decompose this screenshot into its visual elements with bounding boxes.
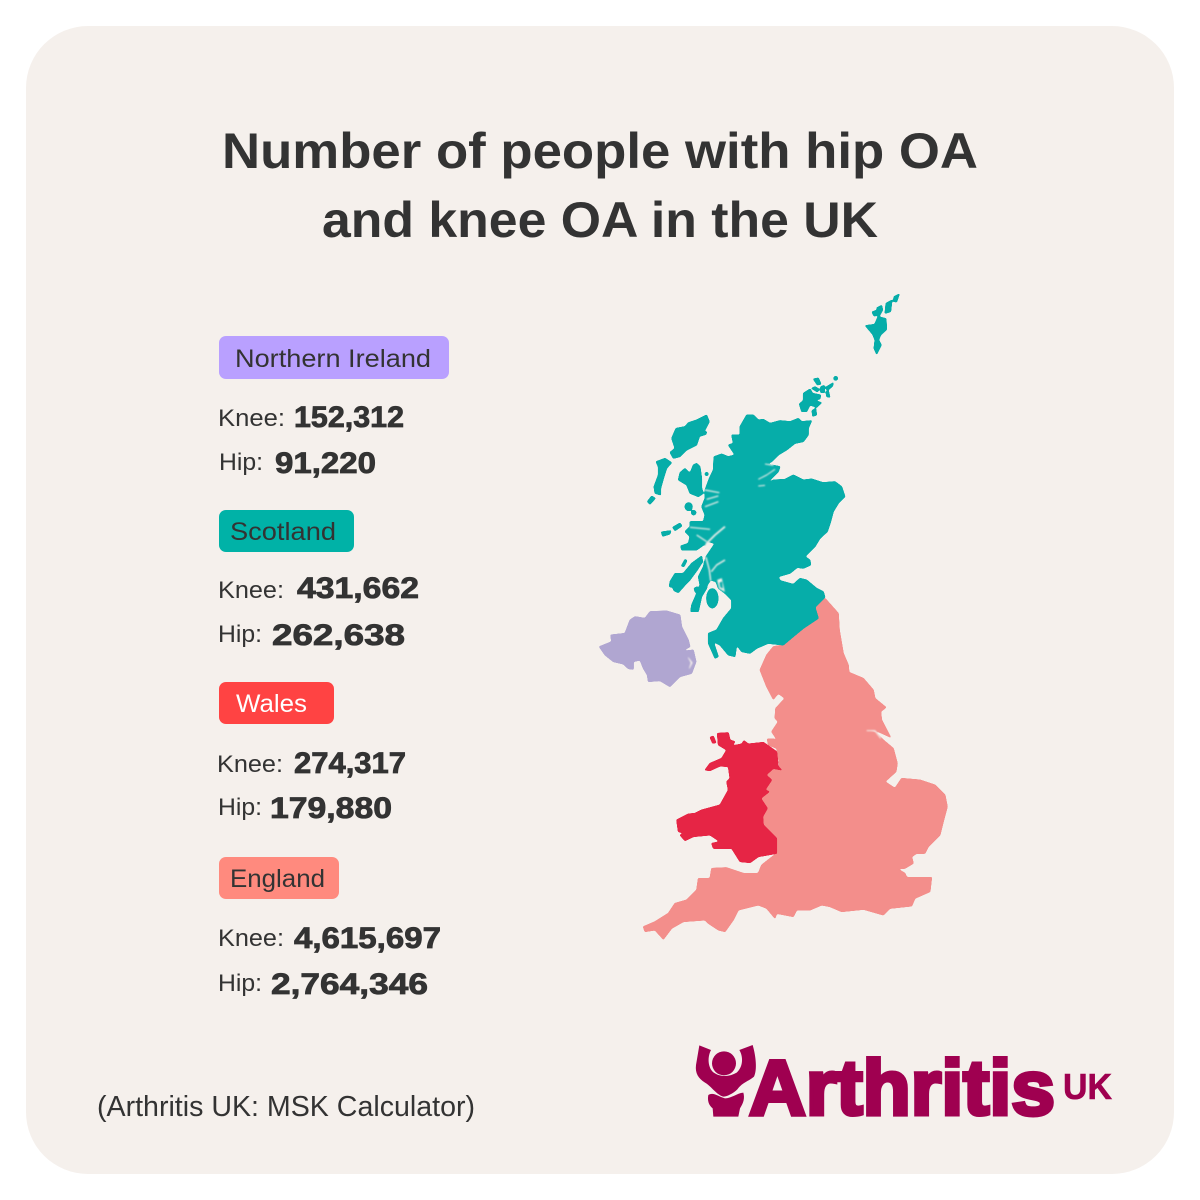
title xyxy=(222,123,978,248)
knee count: Scotland: Knee: xyxy=(218,577,284,604)
knee count: Wales: 274,317 xyxy=(294,747,406,780)
knee count: Wales: Knee: xyxy=(217,751,283,778)
badge: Wales: Wales xyxy=(236,690,307,718)
hip count: Wales: 179,880 xyxy=(270,792,392,825)
hip count: Scotland: Hip: xyxy=(218,621,262,648)
badge: Scotland: Scotland xyxy=(230,518,336,546)
source note: (Arthritis UK: MSK Calculator) xyxy=(97,1091,475,1123)
knee count: England xyxy=(218,922,441,955)
knee count: Wales xyxy=(217,747,406,780)
region: Northern Ireland xyxy=(599,611,696,687)
panel: Wales figures xyxy=(217,682,406,825)
hip count: England xyxy=(218,968,428,1001)
knee count: England: 4,615,697 xyxy=(294,922,441,955)
badge: England xyxy=(219,857,339,899)
title: Number of people with hip OA xyxy=(222,123,978,179)
knee count: Northern Ireland xyxy=(218,401,404,434)
knee count: England: Knee: xyxy=(218,925,284,952)
hip count: Northern Ireland: Hip: xyxy=(219,449,263,476)
wordmark suffix: UK xyxy=(1063,1066,1112,1107)
region: England xyxy=(643,598,947,939)
hip count: Northern Ireland: 91,220 xyxy=(275,447,376,480)
knee count: Northern Ireland: Knee: xyxy=(218,405,285,432)
hip count: Northern Ireland xyxy=(219,447,376,480)
region: Wales xyxy=(677,733,782,863)
badge: Wales xyxy=(219,682,334,724)
knee count: Scotland: 431,662 xyxy=(297,572,419,605)
panel: England figures xyxy=(218,857,441,1001)
hip count: Wales: Hip: xyxy=(218,794,262,821)
knee count: Scotland xyxy=(218,572,419,605)
map: United Kingdom xyxy=(599,294,947,939)
badge: Northern Ireland xyxy=(219,336,449,379)
wordmark: Arthritis xyxy=(749,1044,1055,1132)
knee count: Northern Ireland: 152,312 xyxy=(294,401,404,434)
hip count: England: Hip: xyxy=(218,970,262,997)
region: Scotland xyxy=(647,294,899,658)
panel: Northern Ireland figures xyxy=(218,336,449,480)
panel: Scotland figures xyxy=(218,510,419,652)
logo: Arthritis UK xyxy=(696,1044,1112,1132)
title: and knee OA in the UK xyxy=(322,192,878,248)
badge: Scotland xyxy=(219,510,354,552)
hip count: Wales xyxy=(218,792,392,825)
hip count: Scotland xyxy=(218,619,405,652)
hip count: England: 2,764,346 xyxy=(271,968,428,1001)
badge: England: England xyxy=(230,865,325,893)
hip count: Scotland: 262,638 xyxy=(272,619,405,652)
icon: figure with raised arms xyxy=(696,1045,756,1117)
badge: Northern Ireland: Northern Ireland xyxy=(235,345,431,373)
